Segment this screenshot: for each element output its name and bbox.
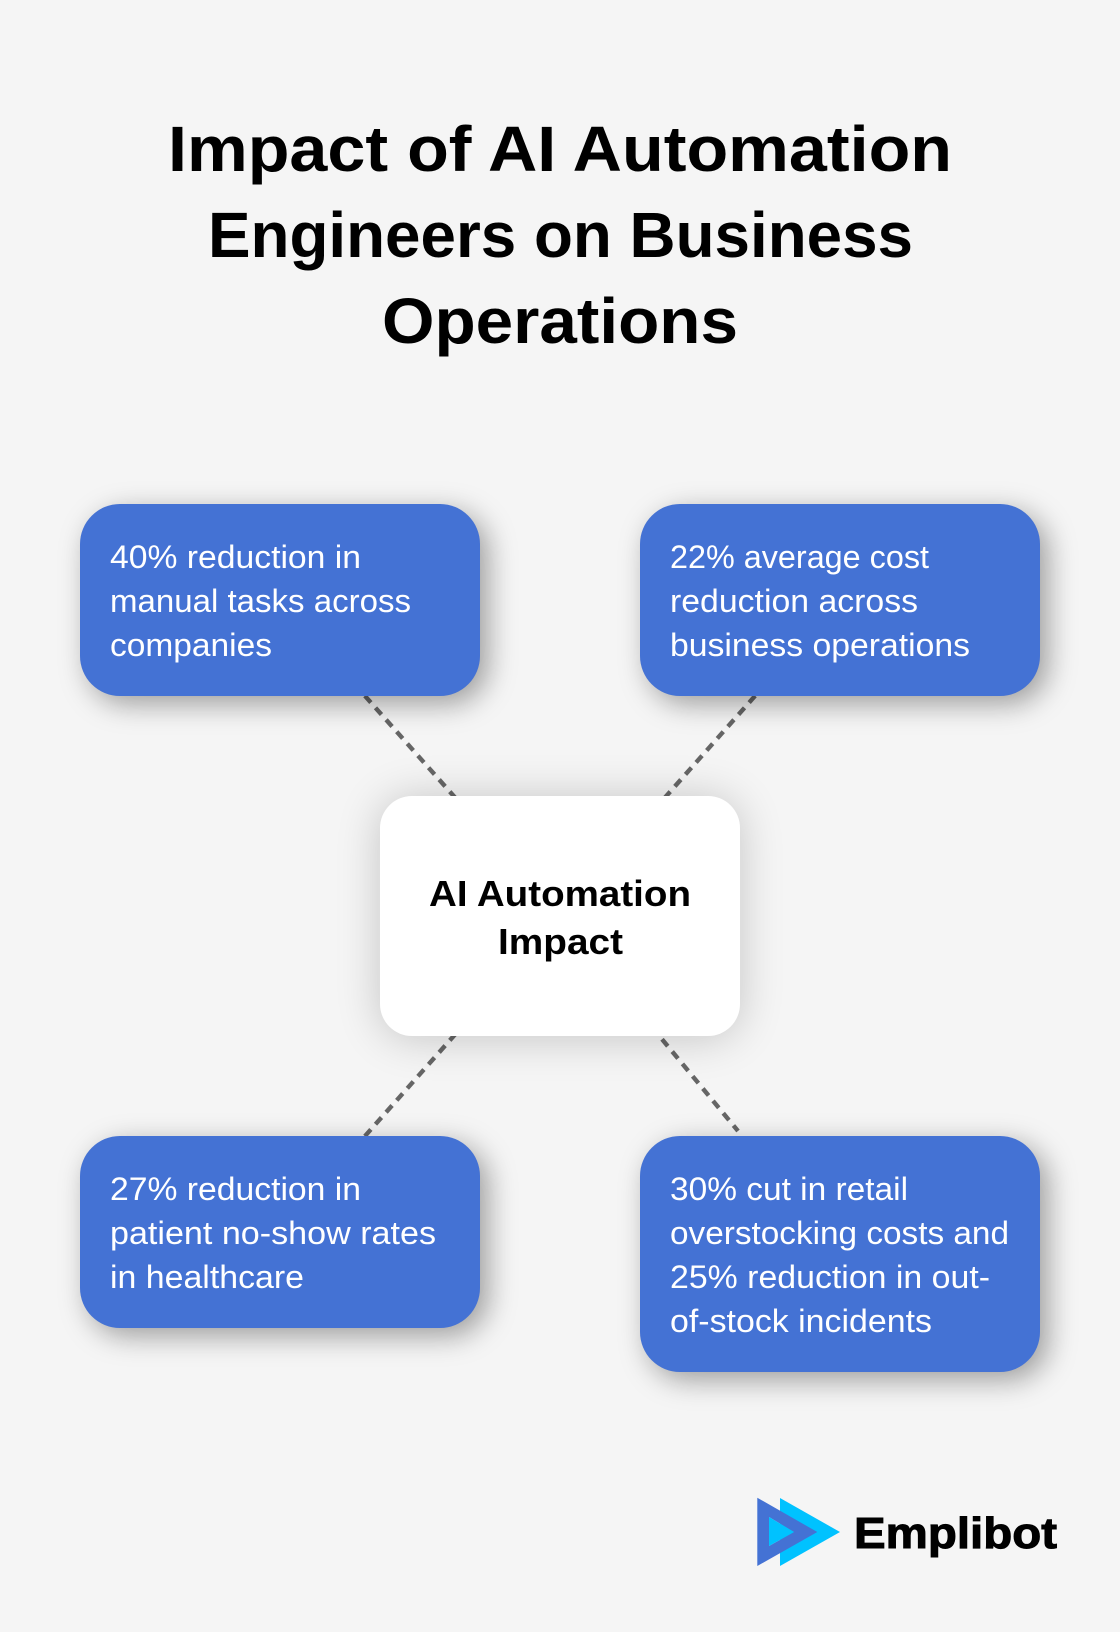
panel: 22% average cost reduction (640, 504, 1040, 696)
panel: 27% reduction in patient no-show rates: patient no-show rates (110, 1215, 436, 1251)
panel: 30% cut in retail overstocking costs: 30% cut in retail (670, 1171, 908, 1207)
panel: 40% reduction in manual tasks: 40% reduction in (110, 539, 361, 575)
panel: 30% cut in retail overstocking costs: of-stock incidents (670, 1303, 932, 1339)
panel: 27% reduction in patient no-show rates: in healthcare (110, 1259, 304, 1295)
title: Engineers on Business (208, 199, 913, 271)
panel: 30% cut in retail overstocking costs: 25% reduction in out- (670, 1259, 990, 1295)
panel: center AI Automation Impact: Impact (498, 921, 623, 962)
panel: 40% reduction in manual tasks: manual tasks across (110, 583, 411, 619)
panel: center AI Automation Impact: AI Automation (429, 873, 691, 914)
panel: 27% reduction in patient no-show rates (80, 1136, 480, 1328)
panel: 40% reduction in manual tasks: companies (110, 627, 272, 663)
panel: 40% reduction in manual tasks (80, 504, 480, 696)
title (168, 113, 952, 357)
title: Impact of AI Automation (168, 113, 952, 185)
panel: 22% average cost reduction: business operations (670, 627, 970, 663)
panel: 30% cut in retail overstocking costs (640, 1136, 1040, 1372)
panel: 22% average cost reduction: 22% average cost (670, 539, 929, 575)
panel: 30% cut in retail overstocking costs: overstocking costs and (670, 1215, 1009, 1251)
title: Operations (382, 285, 738, 357)
panel: 22% average cost reduction: reduction across (670, 583, 918, 619)
panel: 27% reduction in patient no-show rates: 27% reduction in (110, 1171, 361, 1207)
logo: Emplibot: Emplibot (854, 1509, 1057, 1558)
panel: center AI Automation Impact (380, 796, 740, 1036)
